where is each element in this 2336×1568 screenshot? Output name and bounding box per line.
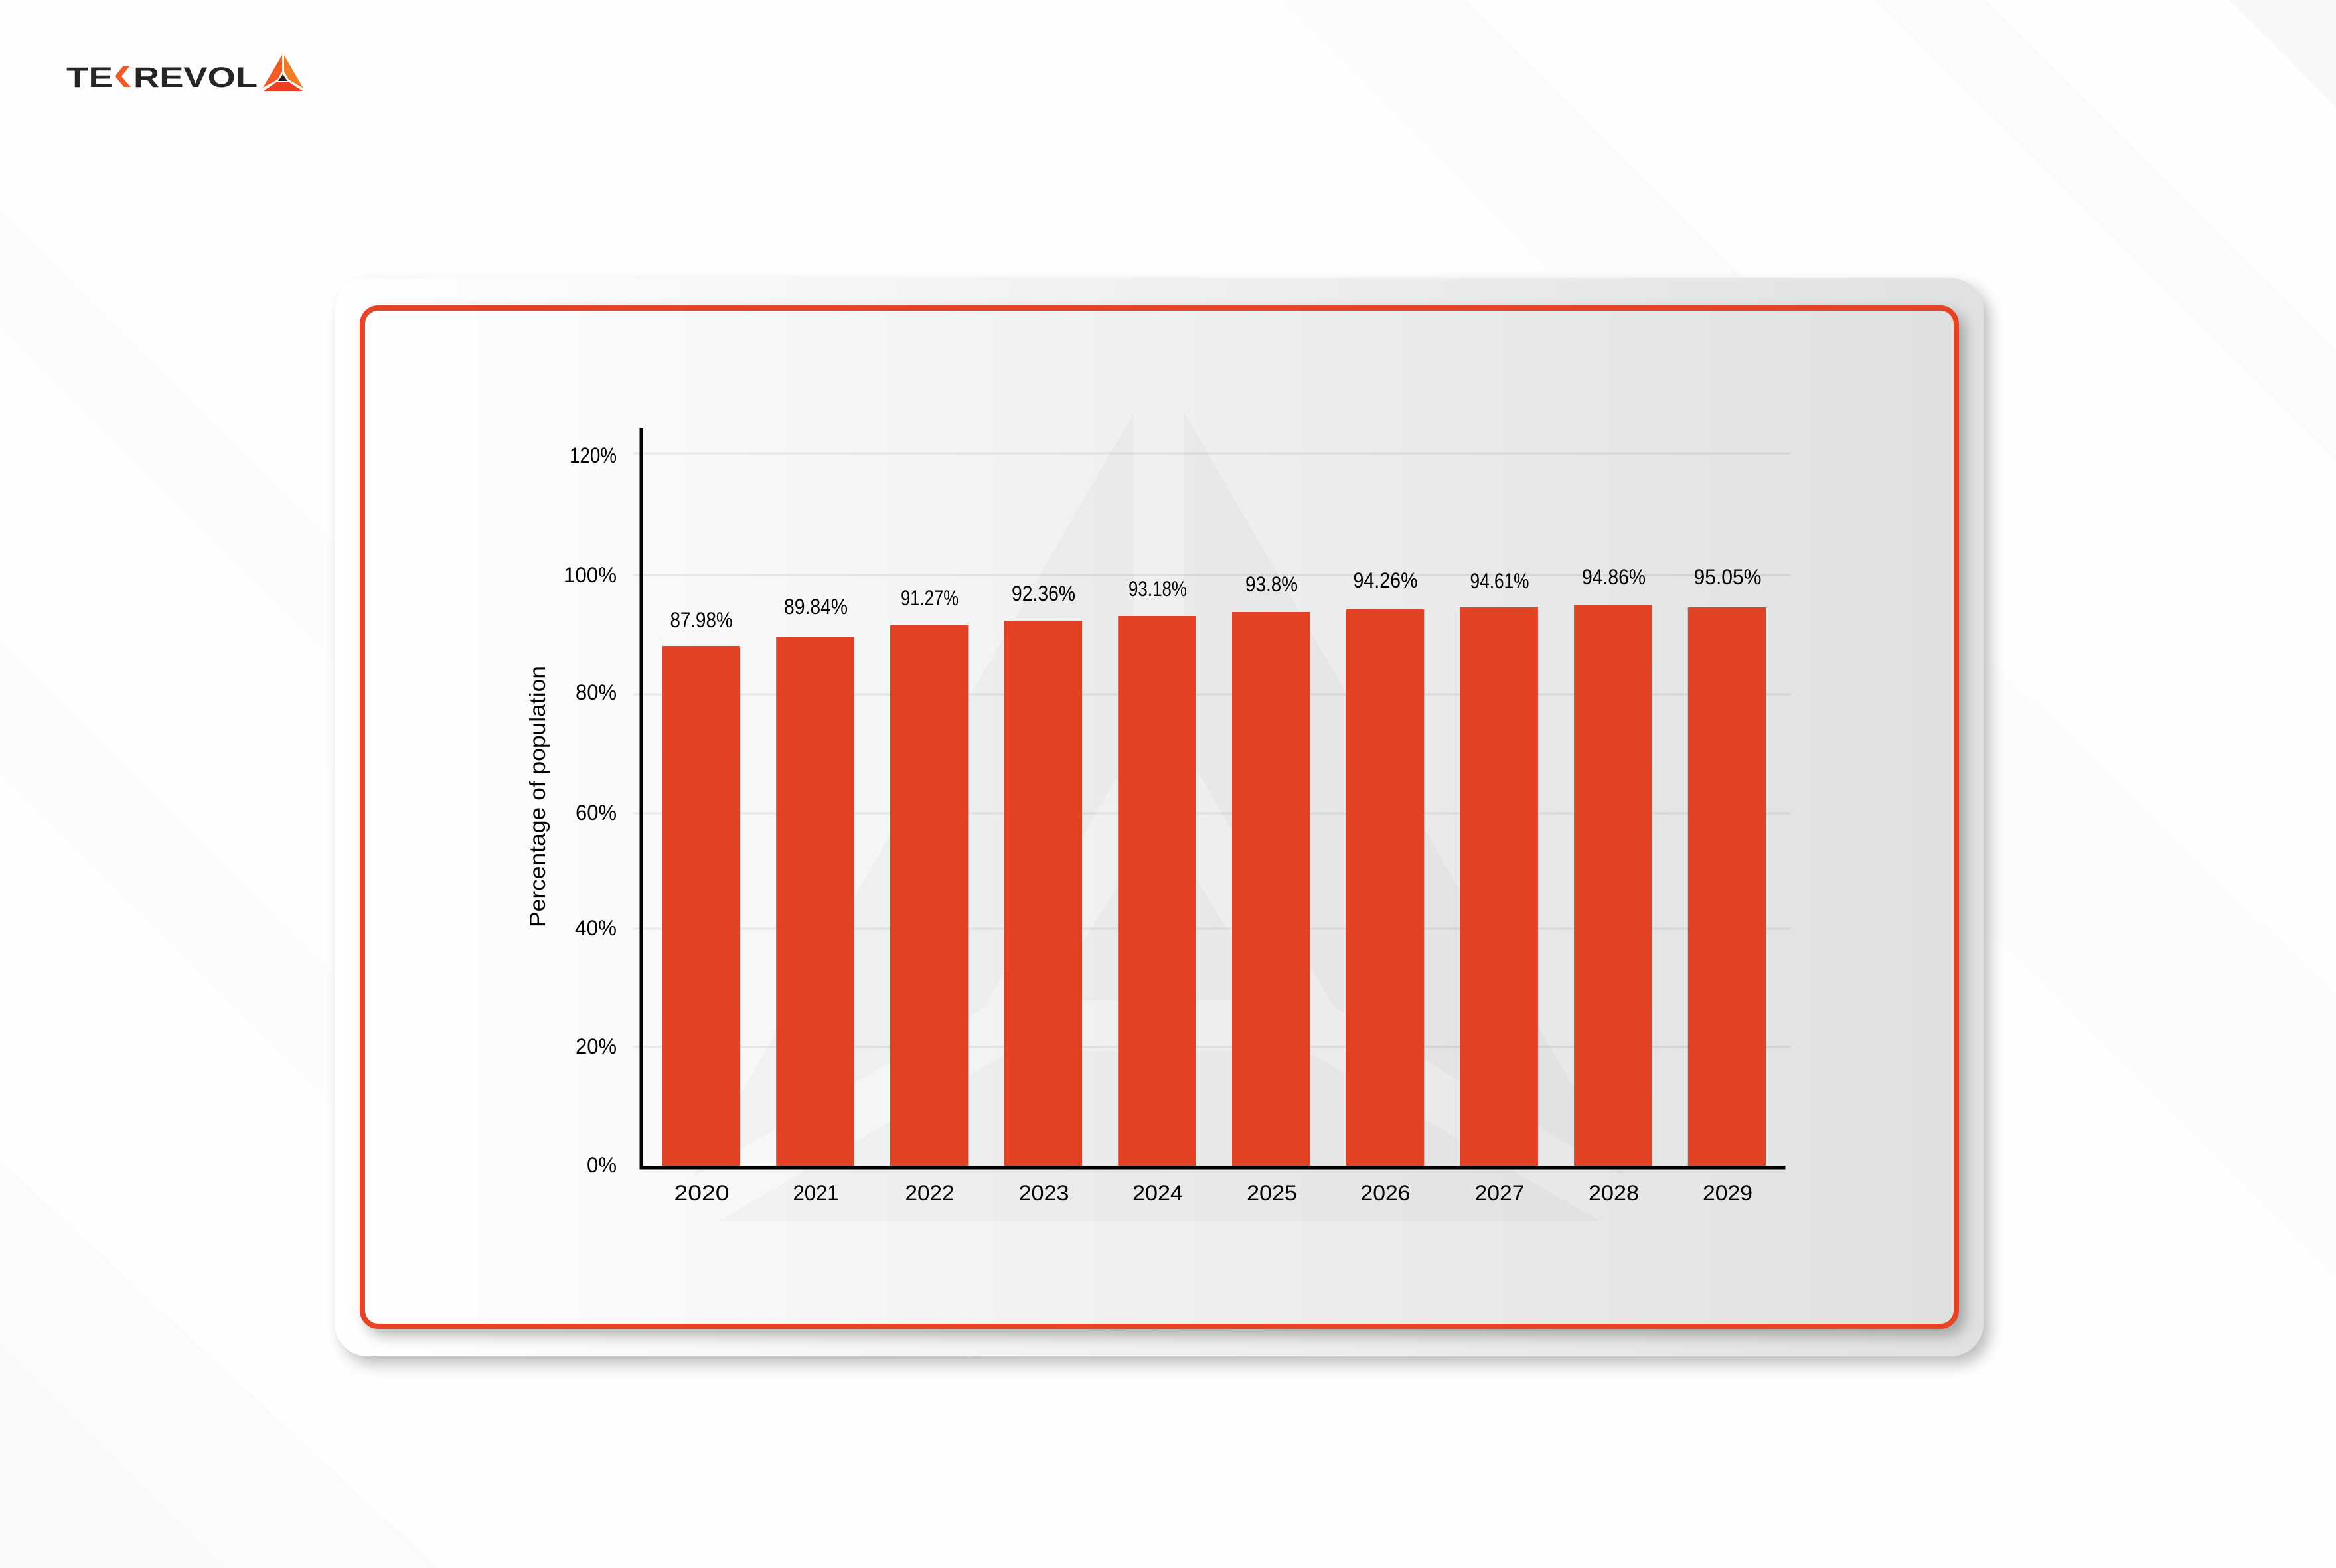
value labels: 91.27%: [901, 586, 959, 610]
value labels: 87.98%: [670, 608, 733, 632]
y-axis labels: 100%: [564, 563, 617, 587]
logo wordmark end: REVOL: [133, 62, 258, 94]
value labels: 93.8%: [1245, 572, 1298, 596]
x-axis year labels: 2024: [1132, 1181, 1183, 1205]
panel: inner red-bordered card: [360, 305, 1959, 1329]
value labels: 94.26%: [1353, 568, 1418, 592]
y-axis labels: 60%: [576, 801, 617, 824]
value labels: 92.36%: [1012, 582, 1075, 605]
value labels: 95.05%: [1694, 565, 1762, 589]
x-axis year labels: 2023: [1018, 1181, 1069, 1205]
bars: [662, 605, 1766, 1166]
value labels: 93.18%: [1129, 577, 1187, 601]
y-axis title: Percentage of population: [525, 666, 550, 927]
logo triangle mark: [263, 55, 303, 91]
y-axis labels: [564, 443, 617, 1177]
panel: outer card: [335, 278, 1984, 1356]
value labels: 89.84%: [784, 595, 848, 619]
x-axis year labels: 2029: [1703, 1181, 1752, 1205]
value labels: [670, 565, 1762, 632]
y-axis labels: 0%: [587, 1153, 617, 1177]
y-axis labels: 80%: [576, 680, 617, 704]
y-axis labels: 20%: [576, 1034, 617, 1058]
x-axis year labels: 2025: [1247, 1181, 1297, 1205]
value labels: 94.61%: [1470, 569, 1529, 593]
x-axis year labels: [674, 1181, 1752, 1205]
axes: [640, 428, 1786, 1170]
value labels: 94.86%: [1582, 565, 1646, 589]
logo wordmark start: TE: [66, 62, 113, 94]
watermark: triangle logo: [692, 412, 1626, 1221]
x-axis year labels: 2021: [793, 1181, 839, 1205]
x-axis year labels: 2027: [1475, 1181, 1524, 1205]
y-axis labels: 120%: [570, 443, 617, 467]
y-axis labels: 40%: [575, 916, 617, 940]
x-axis year labels: 2028: [1589, 1181, 1639, 1205]
x-axis year labels: 2026: [1361, 1181, 1410, 1205]
logo: TEKREVOL: [66, 55, 303, 94]
x-axis year labels: 2022: [905, 1181, 955, 1205]
x-axis year labels: 2020: [674, 1181, 729, 1205]
logo chevron: [115, 66, 131, 87]
